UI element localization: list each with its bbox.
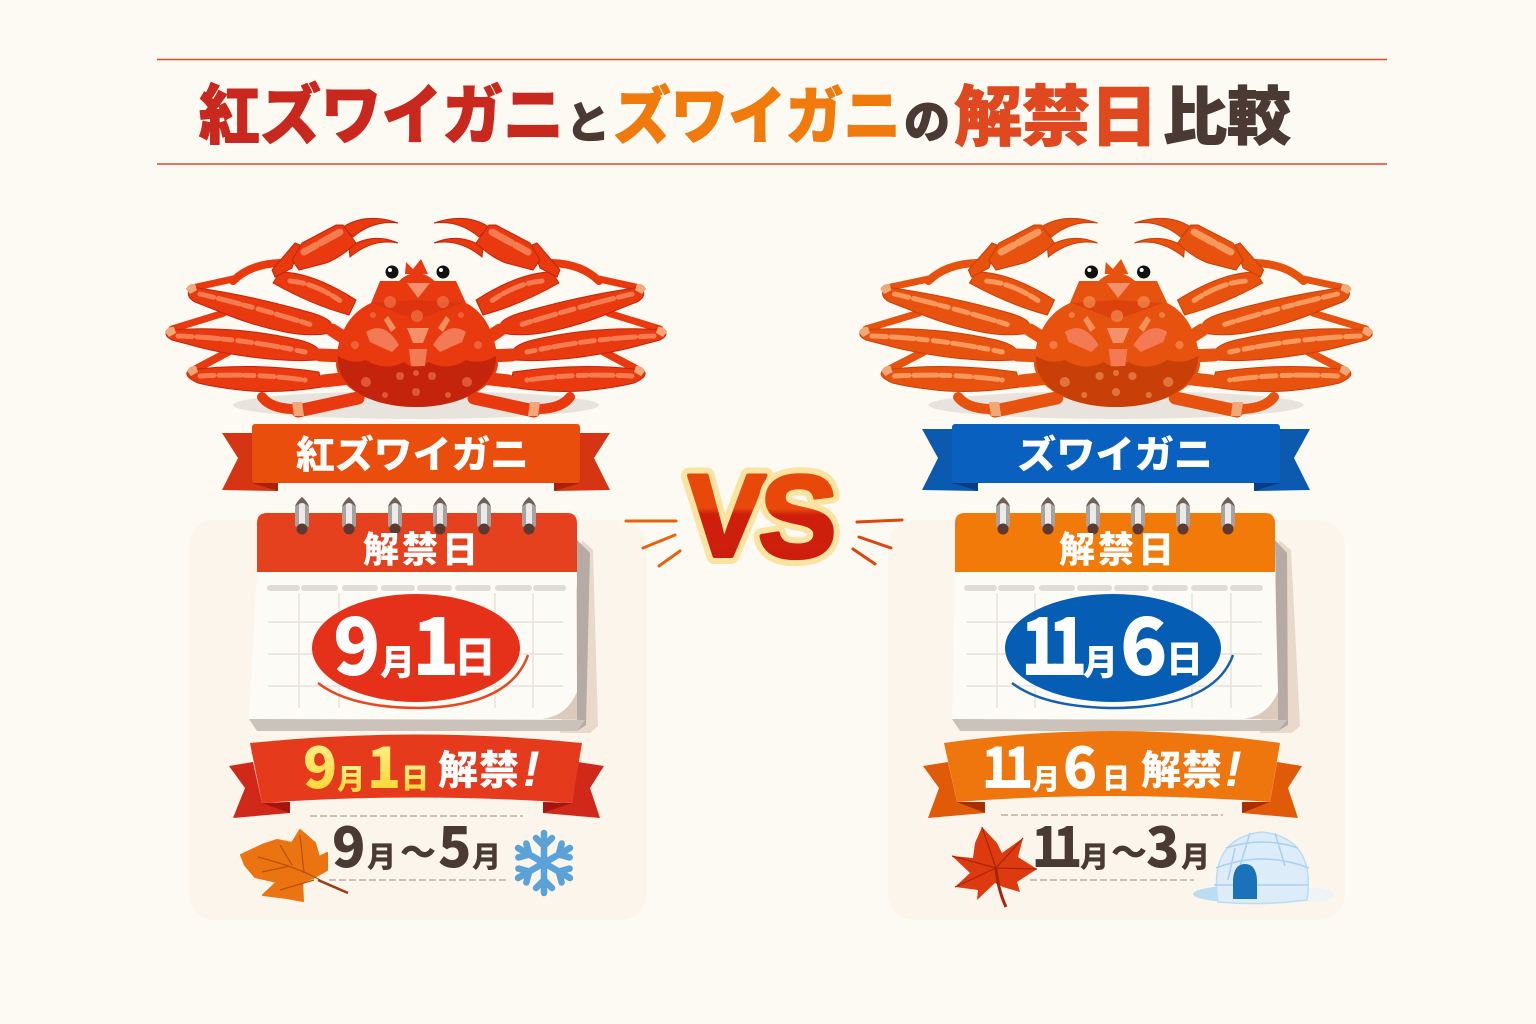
season text: September to May: ～ — [400, 824, 436, 876]
ribbon: red snow crab name — [222, 424, 610, 491]
title — [157, 60, 1387, 164]
ribbon: 11月6日 解禁: 11 — [982, 723, 1031, 804]
ribbon: 11月6日 解禁: 解 — [1141, 738, 1181, 796]
calendar: red snow crab — [249, 497, 598, 733]
season text: November to March: 11 — [1032, 803, 1079, 883]
calendar: red snow crab: 禁 — [402, 521, 438, 573]
season text: November to March: 月 — [1181, 834, 1210, 876]
ribbon: 9月1日 解禁 — [229, 724, 604, 818]
icon: snow crab — [859, 218, 1373, 419]
date oval: November 6: 月 — [1083, 635, 1118, 686]
calendar: snow crab: 日 — [1138, 521, 1174, 573]
ribbon: 11月6日 解禁: 月 — [1032, 758, 1060, 798]
ribbon: 9月1日 解禁: ! — [523, 741, 540, 797]
date oval: November 6: 6 — [1120, 586, 1168, 698]
calendar: snow crab — [952, 497, 1300, 733]
title: 比較 — [1163, 67, 1291, 158]
ribbon: 9月1日 解禁: 日 — [401, 757, 429, 797]
icon: red snow crab — [165, 218, 667, 419]
date oval: September 1: 9 — [333, 586, 381, 698]
ribbon: 11月6日 解禁: ! — [1225, 741, 1242, 797]
VS badge — [626, 450, 902, 582]
season text: September to May: 5 — [438, 803, 472, 883]
date oval: September 1: 日 — [454, 624, 496, 685]
season text: September to May: 9 — [332, 803, 366, 883]
title: と — [566, 87, 610, 151]
season text: September to May: 月 — [367, 834, 396, 876]
date oval: September 1: 1 — [412, 586, 460, 698]
date oval: November 6: 日 — [1166, 629, 1203, 683]
season text: November to March — [1001, 803, 1223, 883]
date oval: November 6: 11 — [1021, 584, 1084, 698]
icon: igloo — [1193, 832, 1334, 904]
season text: September to May — [310, 803, 523, 883]
title: 解禁日 — [954, 64, 1158, 160]
ribbon: 9月1日 解禁: 禁 — [479, 738, 519, 796]
ribbon: 9月1日 解禁: 9 — [303, 724, 337, 805]
icon: autumn leaf — [241, 830, 348, 901]
ribbon: 11月6日 解禁 — [923, 723, 1302, 818]
ribbon: 11月6日 解禁: 6 — [1063, 724, 1097, 805]
icon: maple leaf — [952, 827, 1037, 907]
VS badge: S — [756, 451, 841, 582]
title: 紅ズワイガニ — [199, 63, 564, 157]
ribbon: 9月1日 解禁: 月 — [337, 758, 365, 798]
ribbon: 9月1日 解禁: 1 — [367, 724, 401, 805]
date oval: November 6 — [1005, 584, 1233, 708]
VS badge: V — [683, 450, 768, 581]
VS badge: S — [756, 451, 841, 582]
title: の — [904, 86, 950, 152]
panel: snow crab background — [888, 520, 1345, 920]
ribbon: snow crab name — [922, 424, 1310, 491]
season text: September to May: 月 — [472, 834, 501, 876]
calendar: red snow crab: 解 — [363, 521, 399, 573]
calendar: snow crab: 解 — [1059, 521, 1095, 573]
season text: November to March: 月 — [1080, 834, 1109, 876]
ribbon: 9月1日 解禁: 解 — [438, 738, 478, 796]
VS badge: V — [683, 450, 768, 581]
season text: November to March: 3 — [1146, 803, 1180, 883]
ribbon: 11月6日 解禁: 禁 — [1182, 738, 1222, 796]
panel: red snow crab background — [189, 520, 647, 920]
title: ズワイガニ — [613, 66, 901, 156]
date oval: September 1: 月 — [380, 635, 415, 686]
season text: November to March: ～ — [1111, 824, 1147, 876]
ribbon: red snow crab name: 紅ズワイガニ — [296, 424, 529, 479]
calendar: red snow crab: 日 — [442, 521, 478, 573]
calendar: snow crab: 禁 — [1098, 521, 1134, 573]
date oval: September 1 — [312, 586, 528, 708]
ribbon: 11月6日 解禁: 日 — [1102, 757, 1130, 797]
ribbon: snow crab name: ズワイガニ — [1017, 424, 1213, 479]
icon: snowflake — [514, 833, 574, 893]
